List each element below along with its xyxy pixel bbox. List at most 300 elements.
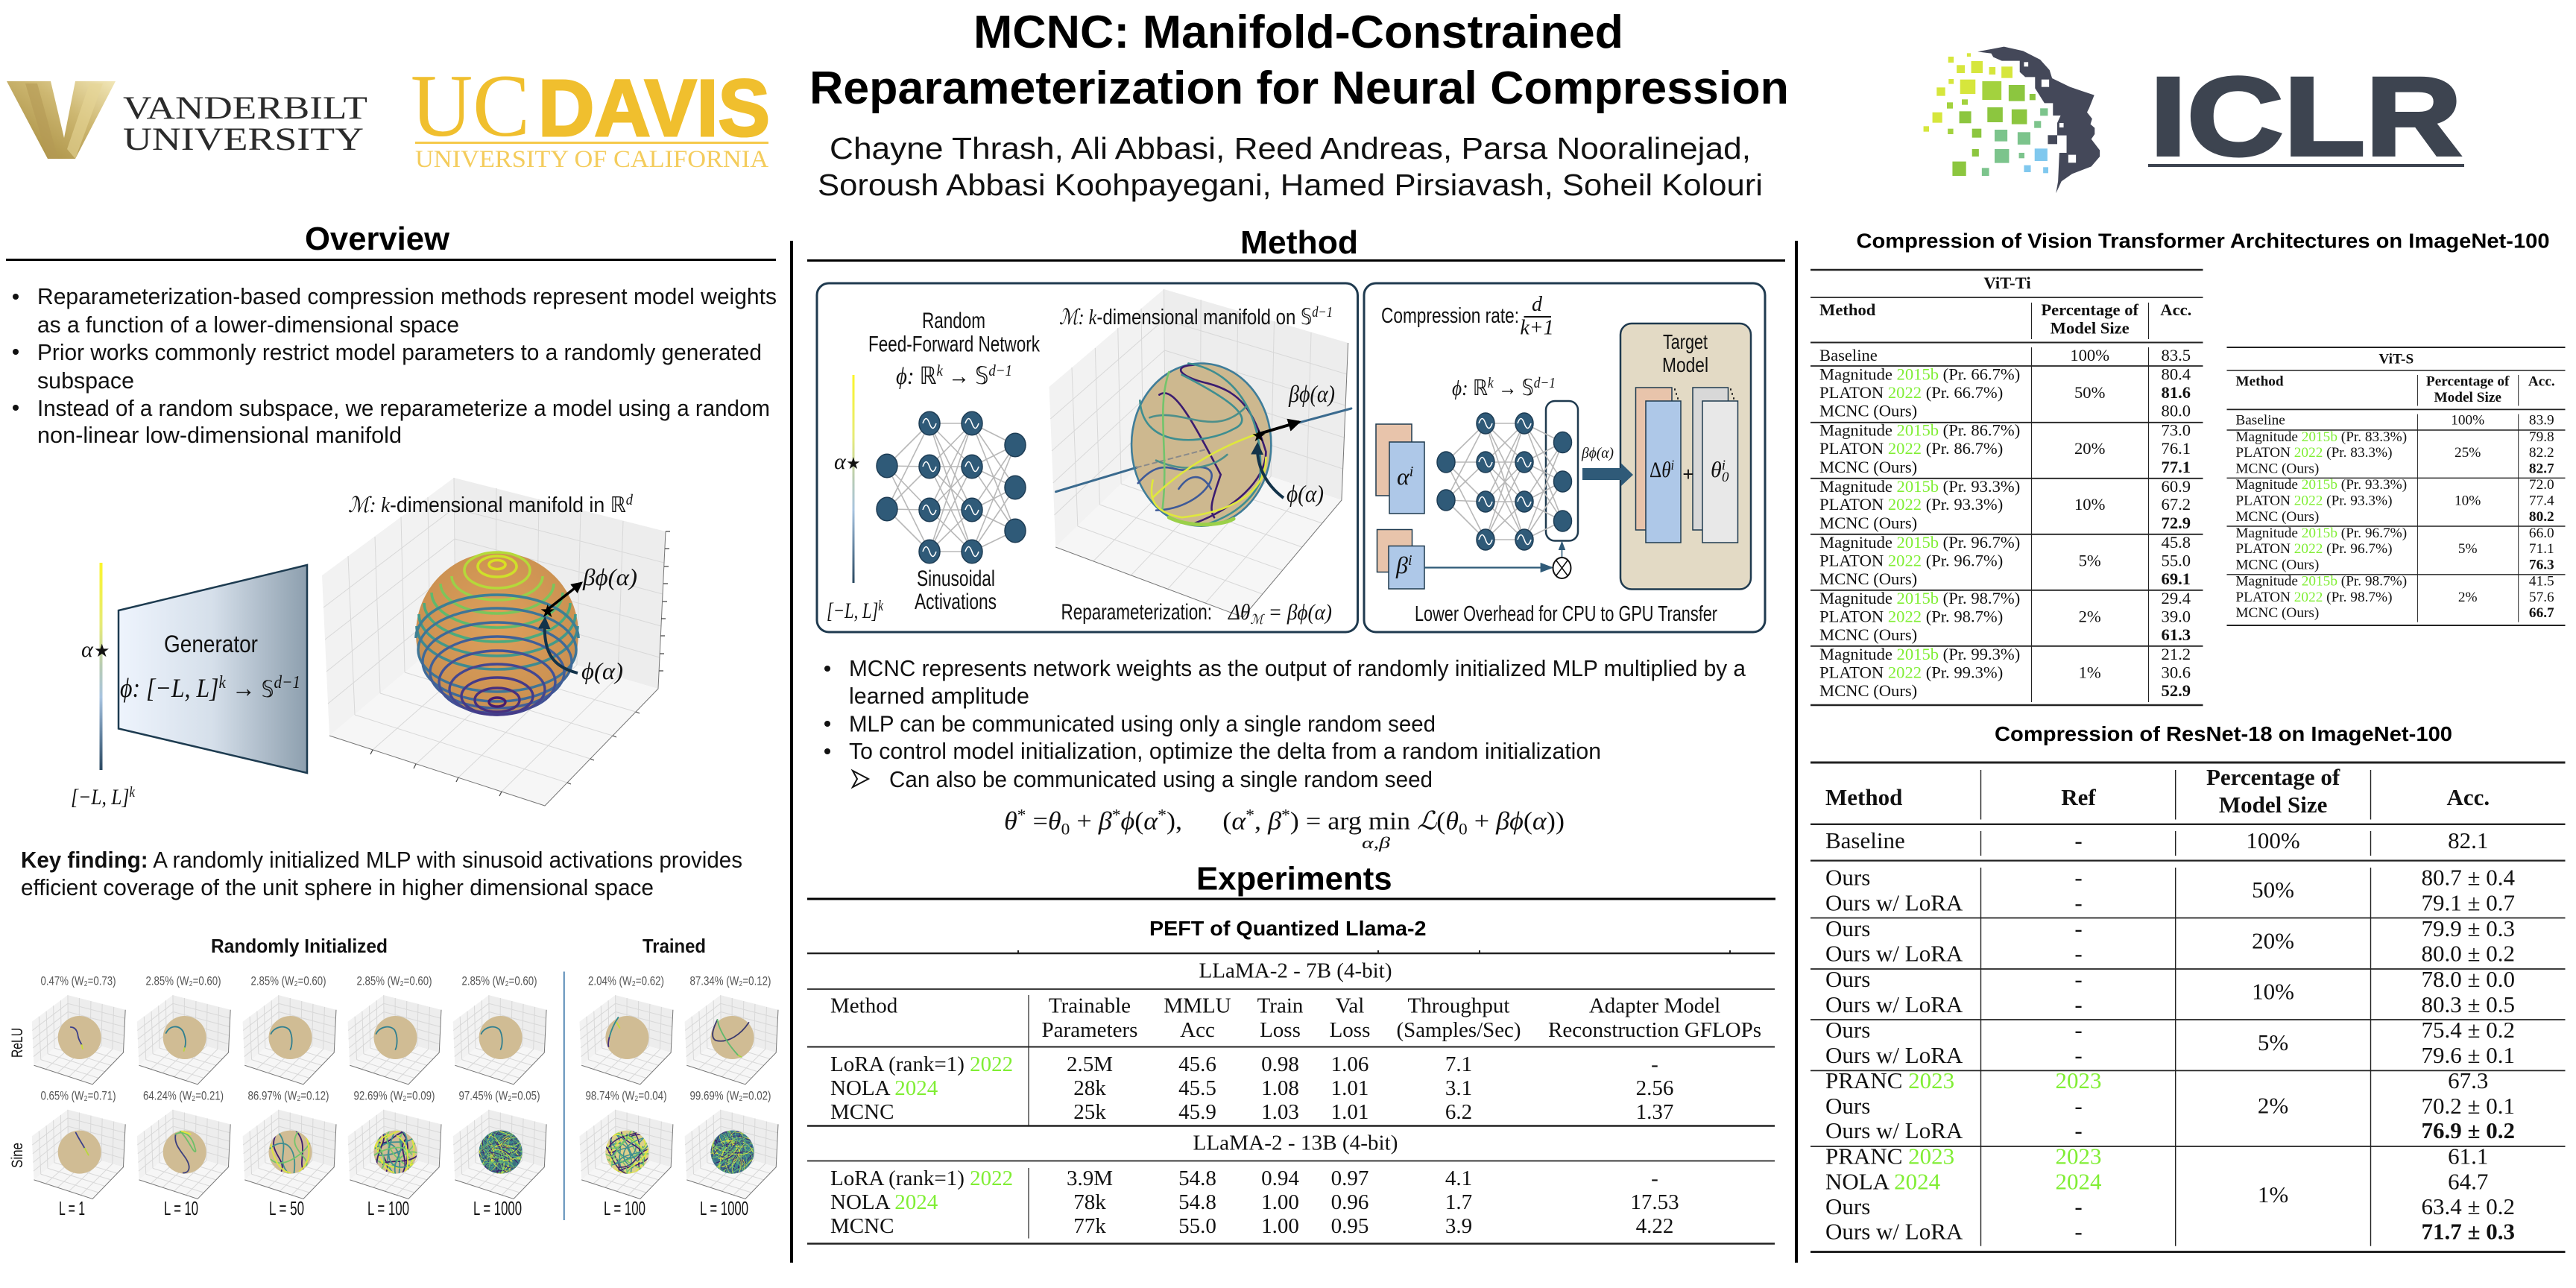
table: PEFT of quantized Llama-2: 0.94 (1261, 1167, 1299, 1190)
table: ViT-S: 66.0 (2529, 525, 2554, 541)
alpha input stack: i (1409, 464, 1413, 480)
table: ResNet-18: - (2074, 1042, 2083, 1068)
plot: Sine trained L=100 (579, 1088, 673, 1199)
figure: generator mapping: [−L, L] (71, 785, 139, 809)
small multiples column labels: L = 1000 (700, 1197, 748, 1219)
overview bullet list: non-linear low-dimensional manifold (37, 422, 402, 448)
small multiples heading: Trained: Trained (643, 935, 706, 957)
table: PEFT of quantized Llama-2: 45.5 (1178, 1076, 1216, 1100)
table: PEFT of quantized Llama-2: 3.1 (1445, 1076, 1472, 1100)
table: PEFT of quantized Llama-2: 2.5M (1067, 1052, 1113, 1076)
table: ViT-Ti: 2% (2079, 607, 2101, 626)
plot: ReLU L=1 (32, 974, 125, 1085)
table: ResNet-18: 79.9 ± 0.3 (2422, 915, 2515, 941)
table: PEFT of quantized Llama-2: 1.06 (1331, 1052, 1368, 1076)
table: ViT-Ti: Magnitude 2015b (Pr. 66.7%) (1819, 365, 2020, 384)
table: PEFT of quantized Llama-2: 25k (1073, 1100, 1106, 1124)
figure: 3D manifold sphere with spiral (322, 478, 670, 806)
table: PEFT of quantized Llama-2: Trainable (1049, 994, 1131, 1018)
table: ViT-Ti: 100% (2070, 346, 2109, 364)
key finding: Key finding: A randomly initialized MLP with sinusoid activations provides (21, 847, 742, 873)
table: ViT-S: 82.7 (2529, 461, 2554, 477)
table: ViT-Ti: 55.0 (2162, 552, 2191, 570)
table: ViT-S: Model Size (2434, 390, 2501, 405)
figure: generator mapping: ★ (94, 641, 110, 661)
table: ViT-Ti: MCNC (Ours) (1819, 625, 1917, 644)
logo: UC Davis: DAVIS (538, 63, 770, 153)
network labels: → (943, 362, 975, 389)
table: ViT-S: 83.9 (2529, 413, 2554, 428)
logo: Vanderbilt University: VANDERBILT (123, 91, 367, 126)
table: ResNet-18: 2024 (2056, 1168, 2102, 1194)
table: ViT-Ti: 21.2 (2162, 645, 2191, 663)
table: ResNet-18: Ref (2061, 784, 2096, 810)
table: ResNet-18: - (2074, 827, 2083, 853)
network label: k (1488, 375, 1494, 391)
equation: * (1017, 805, 1026, 824)
table: ViT-Ti: 73.0 (2162, 421, 2191, 440)
plot: ReLU L=1000 (453, 974, 546, 1085)
table: PEFT of quantized Llama-2: LoRA (rank=1) 2022 (830, 1167, 1013, 1190)
table: ViT-S: PLATON 2022 (Pr. 83.3%) (2235, 445, 2393, 461)
table: PEFT of quantized Llama-2: 1.37 (1636, 1100, 1673, 1124)
table: ViT-S: Method (2235, 374, 2284, 390)
table: ViT-Ti: 61.3 (2162, 625, 2191, 644)
row label: Sine: Sine (9, 1143, 26, 1168)
table: ResNet-18: Model Size (2219, 792, 2327, 818)
target model box (1620, 323, 1751, 589)
equation: θ (1048, 808, 1061, 835)
logo: Vanderbilt University (7, 81, 367, 159)
table: ResNet-18: 82.1 (2448, 827, 2488, 853)
overview bullet list: as a function of a lower-dimensional space (37, 312, 459, 338)
target model box: i (1671, 458, 1674, 473)
latent colorbar (827, 375, 884, 623)
table: ResNet-18: NOLA 2024 (1825, 1168, 1941, 1194)
table: ViT-S: 71.1 (2529, 541, 2554, 557)
table: ViT-S: Percentage of (2426, 374, 2510, 390)
table: PEFT of quantized Llama-2: - (1651, 1052, 1658, 1076)
table: ViT-Ti: MCNC (Ours) (1819, 681, 1917, 700)
heading: ResNet-18 compression: Compression of ResNet-18 on ImageNet-100 (1995, 722, 2452, 745)
table: ResNet-18: 10% (2252, 979, 2294, 1005)
table: ResNet-18: 2023 (2056, 1067, 2102, 1093)
table: PEFT of quantized Llama-2: 77k (1073, 1214, 1106, 1238)
table: ResNet-18: Method (1825, 784, 1902, 810)
plot: Sine L=100 (348, 1088, 441, 1199)
small multiples heading: Randomly Initialized: Randomly Initialized (211, 935, 388, 957)
table: ResNet-18: Ours w/ LoRA (1825, 1042, 1963, 1068)
table: ResNet-18: 70.2 ± 0.1 (2422, 1093, 2515, 1119)
table: ResNet-18: Ours (1825, 966, 1870, 992)
method bullet list: MCNC represents network weights as the output of randomly initialized MLP multiplied by a (849, 655, 1746, 681)
equation: * (1158, 805, 1167, 824)
equation: * (1246, 805, 1254, 824)
equation (1004, 805, 1565, 852)
table: ViT-Ti: Magnitude 2015b (Pr. 96.7%) (1819, 533, 2020, 552)
table: ViT-S: Acc. (2528, 374, 2555, 390)
table: ViT-S: 80.2 (2529, 509, 2554, 525)
plot: Sine L=50 (243, 1088, 336, 1199)
equation: α,β (1362, 833, 1390, 852)
table: ViT-S: MCNC (Ours) (2235, 605, 2319, 621)
table: ResNet-18: 63.4 ± 0.2 (2422, 1193, 2515, 1219)
equation: θ (1004, 808, 1017, 835)
title: MCNC: Manifold-Constrained (973, 7, 1623, 58)
table: PEFT of quantized Llama-2: 1.01 (1331, 1076, 1368, 1100)
table: ResNet-18: 100% (2246, 827, 2300, 853)
method bullet list: MLP can be communicated using only a single random seed (849, 711, 1436, 736)
network label: ϕ: ℝ (1452, 375, 1490, 400)
alpha input stack (1376, 424, 1424, 514)
equation: ) = arg min (1290, 808, 1417, 835)
plot: ReLU L=50: 2.85% (W₂=0.60) (250, 974, 326, 988)
equation: ), ( (1167, 808, 1231, 835)
table: ViT-Ti: PLATON 2022 (Pr. 98.7%) (1819, 607, 2003, 626)
table: ResNet-18: PRANC 2023 (1825, 1143, 1954, 1169)
table: ViT-Ti: 69.1 (2162, 569, 2191, 588)
small multiples column labels: L = 1000 (473, 1197, 522, 1219)
equation: α (1231, 808, 1247, 835)
table: ViT-S: PLATON 2022 (Pr. 96.7%) (2235, 541, 2393, 557)
table: ResNet-18: - (2074, 1117, 2083, 1143)
network label: → (1494, 376, 1522, 400)
method bullet list: To control model initialization, optimize the delta from a random initialization (849, 738, 1601, 764)
table: ResNet-18: 67.3 (2448, 1067, 2488, 1093)
table: PEFT of quantized Llama-2: 7.1 (1445, 1052, 1472, 1076)
heading: Experiments (807, 861, 1775, 900)
table: ViT-Ti: ViT-Ti (1983, 274, 2031, 292)
table: ViT-S: MCNC (Ours) (2235, 461, 2319, 477)
table: PEFT of quantized Llama-2: 1.08 (1261, 1076, 1299, 1100)
heading: Method: Method (1240, 224, 1358, 261)
table heading: PEFT of Quantized Llama-2: PEFT of Quantized Llama-2 (1149, 917, 1427, 940)
plot: ReLU L=1: 0.47% (W₂=0.73) (40, 974, 116, 988)
equation: (α (1134, 808, 1157, 835)
table: ResNet-18: - (2074, 915, 2083, 941)
figure: 3D manifold sphere with spiral: ϕ(α) (581, 657, 623, 684)
target model box: Δθ (1650, 458, 1673, 482)
table: ResNet-18: 2% (2258, 1092, 2288, 1118)
key finding (21, 847, 742, 900)
table: ViT-Ti: 80.0 (2162, 402, 2191, 420)
table: PEFT of quantized Llama-2: Parameters (1042, 1018, 1137, 1042)
table: PEFT of quantized Llama-2: Throughput (1408, 994, 1509, 1018)
table: ViT-Ti: PLATON 2022 (Pr. 66.7%) (1819, 383, 2003, 402)
equation: + (1070, 808, 1099, 835)
table: ResNet-18: Ours w/ LoRA (1825, 1219, 1963, 1245)
heading: Experiments: Experiments (1196, 861, 1392, 897)
table: PEFT of quantized Llama-2: Loss (1330, 1018, 1370, 1042)
table: PEFT of quantized Llama-2: 54.8 (1178, 1190, 1216, 1214)
network labels: ℳ (1250, 612, 1265, 627)
panel: compression and target model (1364, 283, 1765, 632)
compression rate formula: k+1 (1520, 316, 1554, 340)
table: ResNet-18: 78.0 ± 0.0 (2422, 966, 2515, 992)
latent colorbar: [−L, L] (827, 599, 895, 623)
table: ViT-S: PLATON 2022 (Pr. 93.3%) (2235, 493, 2393, 508)
plot: ReLU trained L=100 (579, 974, 673, 1085)
table: ResNet-18: Ours (1825, 1017, 1870, 1043)
table: ViT-Ti: Percentage of (2041, 300, 2139, 319)
figure: generator mapping (71, 563, 307, 809)
table: ViT-S: 82.2 (2529, 445, 2554, 461)
table: ResNet-18: 20% (2252, 928, 2294, 954)
equation: ϕ (1121, 808, 1134, 835)
table: ResNet-18: 50% (2252, 877, 2294, 903)
table: ViT-S: ViT-S (2378, 351, 2414, 367)
table: ViT-Ti: 20% (2074, 439, 2106, 458)
table: ResNet-18: Ours w/ LoRA (1825, 941, 1963, 966)
table: ViT-S: Magnitude 2015b (Pr. 98.7%) (2235, 574, 2407, 589)
table: PEFT of quantized Llama-2: 1.7 (1445, 1190, 1472, 1214)
table: PEFT of quantized Llama-2: Adapter Model (1589, 994, 1720, 1018)
compression rate formula: d (1532, 293, 1543, 316)
table: ViT-S: 10% (2455, 493, 2481, 508)
table: ResNet-18: - (2074, 1219, 2083, 1245)
table: PEFT of quantized Llama-2: Val (1336, 994, 1364, 1018)
table: PEFT of quantized Llama-2: Reconstruction GFLOPs (1548, 1018, 1761, 1042)
authors: Soroush Abbasi Koohpayegani, Hamed Pirsiavash, Soheil Kolouri (818, 168, 1763, 202)
table: ViT-Ti: Baseline (1819, 346, 1878, 364)
compression rate formula: Compression rate: (1381, 304, 1519, 328)
table: ViT-S: PLATON 2022 (Pr. 98.7%) (2235, 590, 2393, 605)
logo: ICLR: ICLR (2150, 54, 2462, 179)
heading: Overview (6, 221, 776, 261)
table: ViT-Ti: MCNC (Ours) (1819, 569, 1917, 588)
table: ViT-Ti: 72.9 (2162, 514, 2191, 532)
logo: ICLR (1924, 47, 2464, 193)
table: ViT-Ti: 1% (2079, 663, 2101, 682)
table: ViT-S: Magnitude 2015b (Pr. 83.3%) (2235, 429, 2407, 445)
table: PEFT of quantized Llama-2: Loss (1260, 1018, 1301, 1042)
table: ViT-Ti: Method (1819, 300, 1876, 319)
plot: ReLU L=100: 2.85% (W₂=0.60) (356, 974, 432, 988)
table: ResNet-18: Ours w/ LoRA (1825, 1117, 1963, 1143)
equation: β (1098, 808, 1112, 835)
target model box: Target (1663, 330, 1708, 353)
table: ViT-Ti: 81.6 (2162, 383, 2191, 402)
heading: Method (807, 224, 1785, 262)
table: PEFT of quantized Llama-2: - (1651, 1167, 1658, 1190)
key finding: efficient coverage of the unit sphere in higher dimensional space (21, 874, 654, 900)
plot: ReLU L=10: 2.85% (W₂=0.60) (145, 974, 221, 988)
target model box: Model (1662, 353, 1708, 376)
table: ResNet-18: Percentage of (2206, 764, 2340, 790)
table: PEFT of quantized Llama-2: 0.97 (1331, 1167, 1368, 1190)
table: ViT-Ti: 60.9 (2162, 477, 2191, 496)
plot: Sine trained L=1000 (682, 1088, 779, 1199)
table: PEFT of quantized Llama-2: MCNC (830, 1214, 894, 1238)
target model box: 0 (1722, 470, 1729, 485)
table: ResNet-18: - (2074, 991, 2083, 1017)
table: ResNet-18: 80.7 ± 0.4 (2422, 865, 2516, 890)
table: PEFT of quantized Llama-2: 3.9 (1445, 1214, 1472, 1238)
column divider: right (1795, 241, 1798, 1263)
plot: Sine L=100: 92.69% (W₂=0.09) (353, 1088, 435, 1102)
equation: + (1468, 808, 1496, 835)
table: PEFT of quantized Llama-2: MCNC (830, 1100, 894, 1124)
table: PEFT of quantized Llama-2: Method (830, 994, 898, 1018)
table: PEFT of quantized Llama-2: 0.96 (1331, 1190, 1368, 1214)
compression rate formula (1381, 293, 1554, 340)
3D manifold on sphere: ϕ(α) (1287, 480, 1324, 507)
method bullet list: Can also be communicated using a single random seed (889, 766, 1433, 792)
caption: Lower Overhead for CPU to GPU Transfer (1415, 602, 1717, 626)
plot: ReLU L=10 (137, 974, 230, 1085)
table: ResNet-18: Ours w/ LoRA (1825, 991, 1963, 1017)
table: PEFT of quantized Llama-2: 17.53 (1630, 1190, 1679, 1214)
figure: 3D manifold sphere with spiral: ★ (540, 602, 556, 622)
plot: Sine L=1: 0.65% (W₂=0.71) (40, 1088, 116, 1102)
table: PEFT of quantized Llama-2: 6.2 (1445, 1100, 1472, 1124)
arrow: output to target model (1581, 445, 1633, 486)
figure: generator mapping: ϕ: [−L, L] (120, 673, 232, 703)
table: ResNet-18: - (2074, 1193, 2083, 1219)
table: PEFT of quantized Llama-2: LLaMA-2 - 7B (4-bit) (1199, 959, 1392, 982)
table: ViT-Ti: 76.1 (2162, 439, 2191, 458)
table: ResNet-18: 1% (2258, 1181, 2288, 1208)
table: PEFT of quantized Llama-2: 78k (1073, 1190, 1106, 1214)
equation: 0 (1061, 820, 1070, 838)
table: PEFT of quantized Llama-2 (807, 950, 1775, 1243)
table: ViT-Ti: 39.0 (2162, 607, 2191, 626)
equation: , (1254, 808, 1268, 835)
compression network diagram (1437, 401, 1578, 550)
table: ViT-Ti: 5% (2079, 552, 2101, 570)
table: ViT-Ti: Model Size (2051, 319, 2130, 338)
3D manifold on sphere: βϕ(α) (1288, 380, 1335, 407)
multiply node and arrows (1424, 542, 1571, 578)
table: ResNet-18 (1811, 763, 2566, 1252)
figure: 3D manifold sphere with spiral: βϕ(α) (582, 564, 637, 590)
figure: generator mapping: α (81, 637, 94, 662)
table: ViT-Ti: MCNC (Ours) (1819, 514, 1917, 532)
heading: Overview: Overview (305, 221, 450, 257)
plot: Sine L=1 (32, 1088, 125, 1199)
logo: UC Davis (411, 56, 770, 173)
title: Reparameterization for Neural Compression (809, 63, 1789, 114)
table: PEFT of quantized Llama-2: 1.00 (1261, 1214, 1299, 1238)
table: PEFT of quantized Llama-2: 2.56 (1636, 1076, 1673, 1100)
panel: random feed-forward network and manifold (817, 283, 1358, 632)
table: ViT-S (2227, 347, 2566, 625)
table: PEFT of quantized Llama-2: NOLA 2024 (830, 1190, 938, 1214)
network label: d−1 (1534, 375, 1556, 391)
table: ViT-Ti: PLATON 2022 (Pr. 93.3%) (1819, 495, 2003, 514)
table: PEFT of quantized Llama-2: 4.1 (1445, 1167, 1472, 1190)
table: PEFT of quantized Llama-2: 45.9 (1178, 1100, 1216, 1124)
plot: ReLU trained L=100: 2.04% (W₂=0.62) (588, 974, 664, 988)
beta input stack: β (1396, 552, 1408, 578)
method bullet list (824, 655, 1746, 792)
table: ViT-Ti: MCNC (Ours) (1819, 402, 1917, 420)
network labels: Random (922, 309, 985, 333)
table: ResNet-18: 2023 (2056, 1143, 2102, 1169)
table: PEFT of quantized Llama-2: 55.0 (1178, 1214, 1216, 1238)
table: ViT-S: Baseline (2235, 413, 2285, 428)
plot: Sine L=10 (137, 1088, 230, 1199)
table: ViT-S: 66.7 (2529, 605, 2554, 621)
table: ViT-Ti: 52.9 (2162, 681, 2191, 700)
logo: UC Davis: UNIVERSITY OF CALIFORNIA (415, 146, 768, 173)
table: PEFT of quantized Llama-2: 1.03 (1261, 1100, 1299, 1124)
table: ViT-Ti: PLATON 2022 (Pr. 96.7%) (1819, 552, 2003, 570)
figure: 3D manifold sphere with spiral: d (626, 492, 634, 508)
table: PEFT of quantized Llama-2: LLaMA-2 - 13B (4-bit) (1193, 1131, 1398, 1155)
table: ViT-Ti: Magnitude 2015b (Pr. 99.3%) (1819, 645, 2020, 663)
table: ViT-Ti: 80.4 (2162, 365, 2191, 384)
plot: ReLU L=100 (348, 974, 441, 1085)
table: ResNet-18: - (2074, 865, 2083, 890)
figure: generator mapping: k (129, 784, 136, 801)
figure: 3D manifold sphere with spiral: ℳ: k-dimensional manifold in ℝ (348, 493, 646, 517)
plot: Sine trained L=100: 98.74% (W₂=0.04) (586, 1088, 667, 1102)
table: ViT-Ti: Magnitude 2015b (Pr. 86.7%) (1819, 421, 2020, 440)
table: ViT-Ti: 67.2 (2162, 495, 2191, 514)
latent colorbar: k (878, 598, 884, 614)
table: ViT-S: 72.0 (2529, 477, 2554, 493)
table: ResNet-18: - (2074, 966, 2083, 992)
authors (818, 131, 1763, 202)
network labels: = βϕ(α) (1263, 600, 1332, 625)
overview bullet list: subspace (37, 367, 134, 394)
latent colorbar: α (834, 449, 847, 474)
table: PEFT of quantized Llama-2: 4.22 (1636, 1214, 1673, 1238)
table: ResNet-18: 5% (2258, 1029, 2288, 1055)
small multiples column labels: L = 100 (604, 1197, 645, 1219)
table: ResNet-18: 71.7 ± 0.3 (2422, 1219, 2515, 1245)
table: ResNet-18: 61.1 (2448, 1143, 2488, 1169)
table: ResNet-18: Ours w/ LoRA (1825, 889, 1963, 915)
table: ResNet-18: 75.4 ± 0.2 (2422, 1017, 2515, 1043)
method bullet list: learned amplitude (849, 683, 1029, 709)
table: ResNet-18: Ours (1825, 1093, 1870, 1119)
table: ViT-S: MCNC (Ours) (2235, 558, 2319, 573)
network labels: k (936, 362, 943, 379)
network labels: d−1 (988, 362, 1012, 379)
column divider: left (790, 241, 793, 1263)
equation: * (1112, 805, 1121, 824)
table: ResNet-18: - (2074, 889, 2083, 915)
equation: = (1026, 808, 1048, 835)
table: ResNet-18: - (2074, 941, 2083, 966)
network labels (868, 304, 1333, 627)
table: ViT-Ti: 77.1 (2162, 458, 2191, 476)
network labels: Δθ (1228, 600, 1252, 625)
equation: * (1281, 805, 1290, 824)
network labels: ℳ: k-dimensional manifold on 𝕊 (1059, 304, 1337, 329)
beta input stack (1377, 529, 1424, 589)
network labels: Sinusoidal (917, 566, 995, 591)
table: ResNet-18: 80.0 ± 0.2 (2422, 941, 2515, 966)
overview bullet list: Prior works commonly restrict model parameters to a randomly generated (37, 339, 762, 365)
table: ViT-S: 41.5 (2529, 574, 2554, 589)
table: PEFT of quantized Llama-2: MMLU (1164, 994, 1231, 1018)
table: ResNet-18: 80.3 ± 0.5 (2422, 991, 2515, 1017)
table: ResNet-18: 79.6 ± 0.1 (2422, 1042, 2515, 1068)
table: ViT-Ti: PLATON 2022 (Pr. 99.3%) (1819, 663, 2003, 682)
table: PEFT of quantized Llama-2: (Samples/Sec) (1397, 1018, 1521, 1042)
table: ViT-S: 76.3 (2529, 558, 2554, 573)
authors: Chayne Thrash, Ali Abbasi, Reed Andreas, Parsa Nooralinejad, (830, 131, 1751, 165)
equation: 0 (1459, 820, 1468, 838)
equation: ℒ(θ (1417, 808, 1458, 835)
table: ResNet-18: 64.7 (2448, 1168, 2488, 1194)
table: ViT-Ti: Magnitude 2015b (Pr. 98.7%) (1819, 589, 2020, 607)
table: PEFT of quantized Llama-2: 28k (1073, 1076, 1106, 1100)
table: ViT-S: 79.8 (2529, 429, 2554, 445)
